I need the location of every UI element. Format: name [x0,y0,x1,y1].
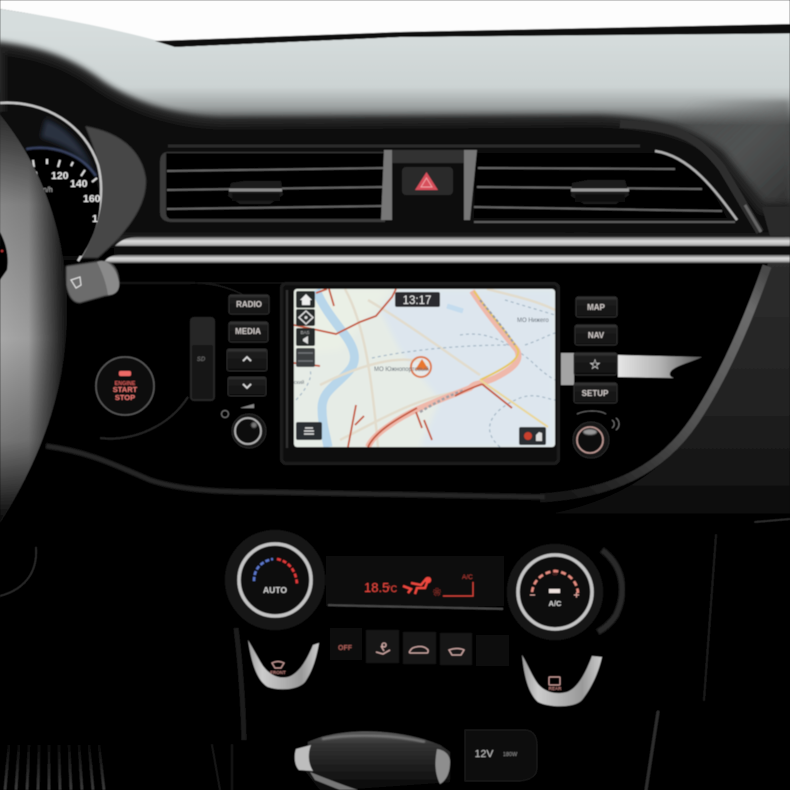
speedometer dial: m/h [41,187,53,194]
front defrost paddle: FRONT [270,670,286,675]
navigation screen [280,282,560,465]
temperature display [326,556,504,610]
temperature display: ❀ [433,588,441,597]
tune knob [573,411,619,458]
down button [228,377,266,396]
chrome trim strips [104,237,790,263]
media button: MEDIA [235,327,261,336]
up button [227,349,267,371]
side console edges [236,628,244,740]
right fan knob [507,544,603,640]
wiper stalk [66,261,119,303]
right fan knob: A/C [549,599,562,608]
speedometer dial: 1 [92,213,98,225]
rear defrost paddle [522,655,602,706]
speedometer dial: 120 [51,170,69,182]
steering wheel rim [0,115,67,522]
river [316,290,354,447]
map side buttons [296,291,546,445]
rear defrost paddle: REAR [549,686,562,691]
start stop button: ENGINE [115,381,136,387]
map: ский [294,379,304,386]
instrument cluster binnacle [0,103,146,261]
speedometer dial: 160 [83,193,101,205]
volume knob [222,404,266,448]
speedometer dial: 140 [70,178,88,190]
map [294,289,555,447]
lower right trim [212,519,790,790]
vent slider [228,181,283,204]
temperature display: A/C [462,574,473,581]
hazard button [381,150,477,220]
clock [395,292,440,307]
front defrost paddle [248,640,319,689]
left radio buttons [227,295,269,396]
map side buttons: BAS [300,330,310,335]
SD card slot [190,317,215,401]
screen bezel [280,282,560,465]
gloss reflection [561,353,702,385]
console trim band [540,266,767,498]
climate button row [330,628,509,666]
textured side panel [520,263,790,518]
dashboard top surface [0,9,790,240]
nav button: NAV [588,331,605,340]
map button: MAP [587,303,606,312]
favourite button: ☆ [590,358,600,371]
left temperature knob: AUTO [263,585,287,595]
lower left dash trim [0,547,36,596]
speedometer dial: 0 [32,169,38,181]
map labels: МО Южнопортовый [374,366,429,373]
map: МО Нижего [517,318,549,324]
left temperature knob [225,530,325,630]
traffic roads [294,289,512,447]
start stop button: START [113,385,138,394]
temperature display: °C [387,584,398,594]
gear shift lever [295,731,450,790]
radio button: RADIO [236,300,262,309]
vent slider [571,180,629,204]
12V socket panel: 12V [475,748,493,760]
center console piano black [46,264,767,498]
right vent [474,151,737,222]
climate housing [225,532,625,790]
speedometer dial [26,148,101,256]
position marker [411,357,431,377]
SD card slot: SD [197,357,206,363]
setup button: SETUP [582,389,609,398]
start stop button: STOP [115,393,135,402]
12V socket panel: 180W [503,752,518,758]
climate button row: OFF [338,645,353,652]
lower left grille [5,745,104,790]
dotted boundaries [296,300,555,447]
windshield: white backdrop [0,0,790,42]
start stop button [96,357,188,439]
clock: 13:17 [403,295,431,307]
air vents [146,124,761,233]
right radio buttons [574,297,617,403]
minor roads [320,289,555,447]
left vent [160,152,386,222]
right fan knob: ❀ [552,569,558,577]
temperature display: 18.5 [364,580,389,595]
climate control unit [225,530,625,790]
12V socket panel [465,730,537,781]
motorway [368,291,519,447]
